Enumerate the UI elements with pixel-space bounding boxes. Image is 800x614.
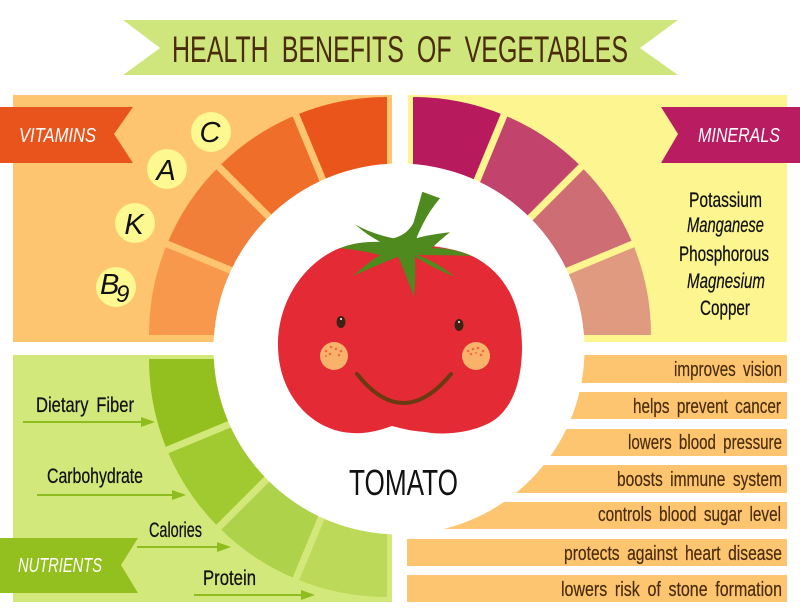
bar: protects against heart disease <box>407 539 787 566</box>
vitamin B9 badge: 9 <box>116 281 129 308</box>
title banner <box>123 20 678 75</box>
bar: improves vision <box>560 355 787 383</box>
ribbon: vitamins <box>0 107 133 163</box>
central white circle <box>214 164 584 534</box>
ribbon: minerals: MINERALS <box>698 125 781 147</box>
label: dietary fiber with arrow: Dietary Fiber <box>36 394 134 417</box>
panel: minerals <box>408 95 787 342</box>
bar: helps prevent cancer <box>560 392 787 419</box>
vitamins arc segments <box>149 97 387 335</box>
nutrients arc segments <box>149 359 387 597</box>
vitamin C badge: C <box>200 117 222 149</box>
benefit bars <box>407 355 787 602</box>
minerals arc segments <box>413 97 651 335</box>
vegetable name: TOMATO <box>349 462 458 503</box>
bar: boosts immune system <box>500 465 787 493</box>
vitamin A badge: A <box>154 155 176 187</box>
bar: lowers blood pressure <box>520 429 787 456</box>
bar: lowers risk of stone formation <box>407 575 787 602</box>
label: carbohydrate with arrow <box>37 465 186 500</box>
vitamin B9 badge: B <box>100 269 119 301</box>
minerals list: Manganese <box>687 214 764 237</box>
label: carbohydrate with arrow: Carbohydrate <box>47 465 143 488</box>
smile <box>357 374 451 403</box>
label: protein with arrow: Protein <box>203 567 256 590</box>
vitamin B9 badge <box>96 267 136 308</box>
vitamin K badge: K <box>124 209 145 241</box>
vitamin A badge <box>147 149 187 189</box>
ribbon: vitamins: VITAMINS <box>19 125 97 147</box>
vitamin K badge <box>115 203 155 243</box>
eyes <box>336 316 464 331</box>
label: calories with arrow: Calories <box>149 519 202 542</box>
panel: vitamins <box>13 95 392 342</box>
minerals list: Copper <box>700 297 750 320</box>
tomato body <box>278 243 522 434</box>
minerals list: Magnesium <box>687 270 765 293</box>
ribbon: nutrients: NUTRIENTS <box>18 555 102 577</box>
minerals list: Potassium <box>689 189 762 212</box>
illustration: tomato character <box>278 192 522 434</box>
minerals list: Phosphorous <box>679 243 769 266</box>
label: dietary fiber with arrow <box>23 394 155 427</box>
label: protein with arrow <box>194 567 315 600</box>
vitamin C badge <box>191 112 231 152</box>
bar: controls blood sugar level <box>430 502 787 529</box>
ribbon: nutrients <box>0 538 138 593</box>
minerals list <box>679 189 769 320</box>
label: calories with arrow <box>137 519 231 552</box>
panel: nutrients <box>13 355 392 602</box>
stem and calyx <box>340 192 472 297</box>
ribbon: minerals <box>661 107 800 163</box>
cheeks <box>320 342 490 370</box>
